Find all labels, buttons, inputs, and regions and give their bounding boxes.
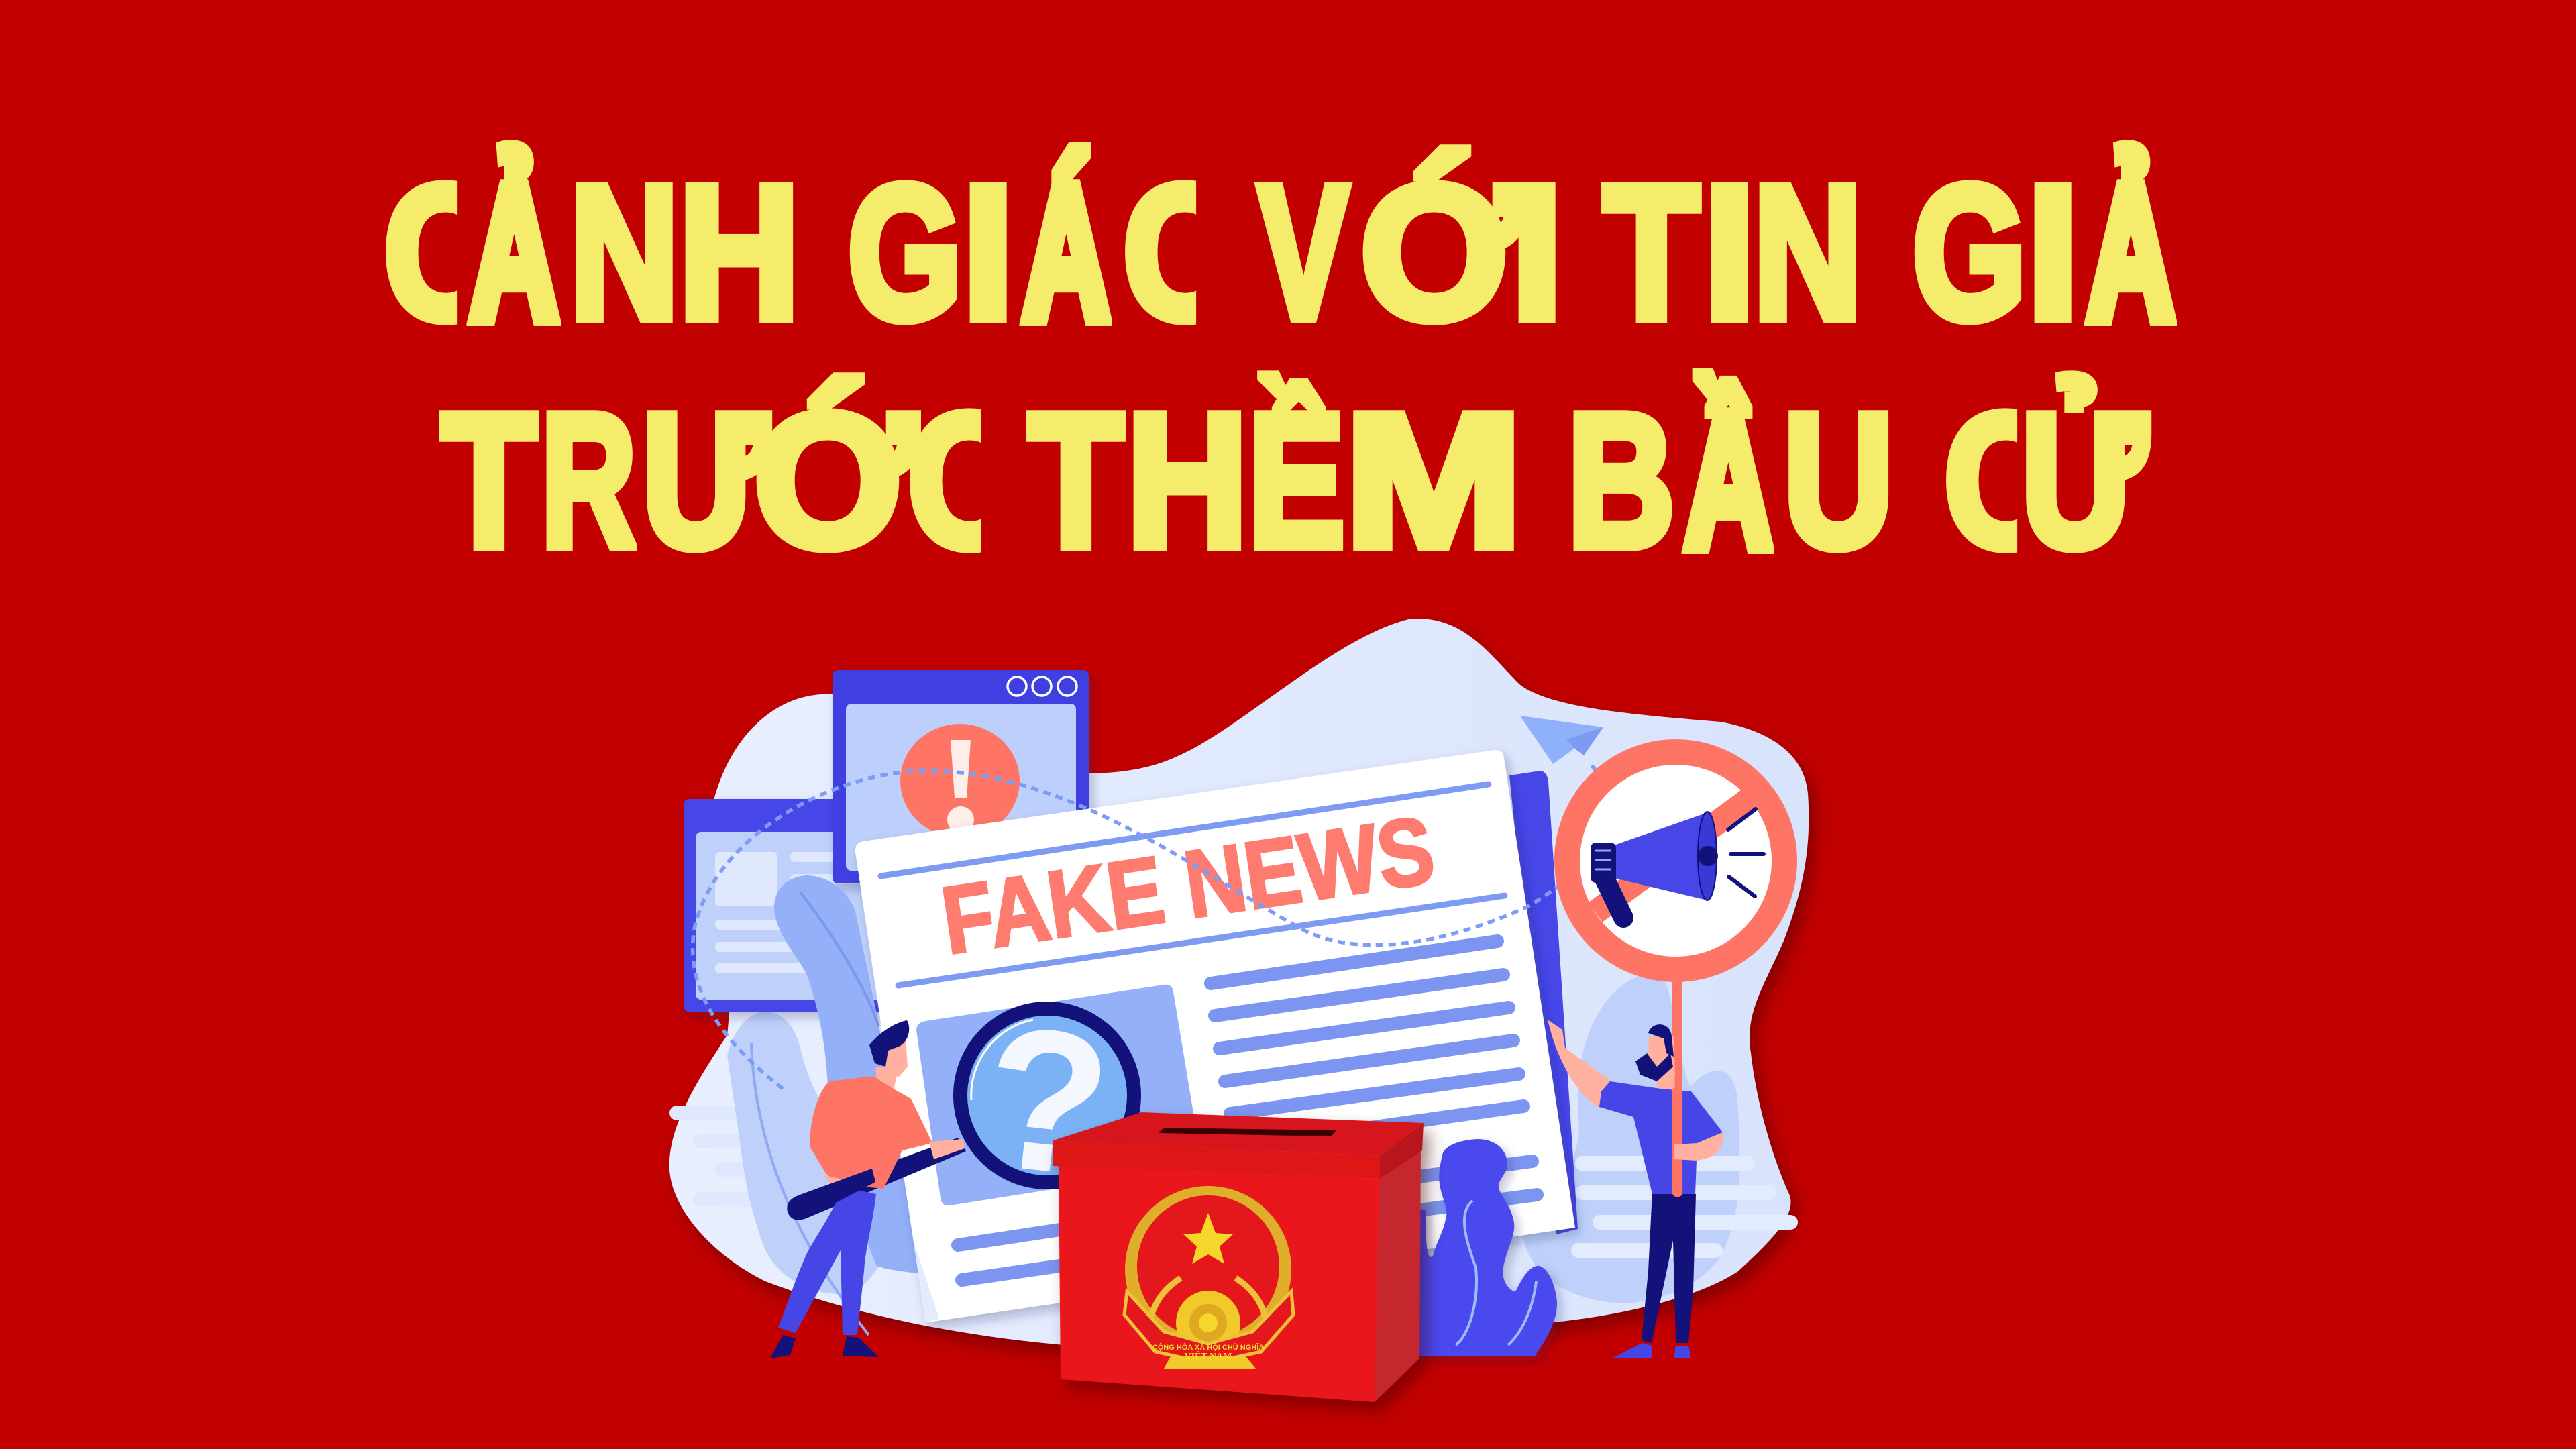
title line 1: G bbox=[1913, 146, 2027, 358]
beard bbox=[1635, 1053, 1673, 1081]
title line 2: B bbox=[1568, 374, 1674, 586]
head bbox=[883, 1036, 908, 1077]
hand on pole bbox=[1674, 1132, 1723, 1161]
lid side bbox=[1380, 1123, 1424, 1179]
title line 1: I bbox=[1511, 146, 1562, 358]
handle over hand bbox=[787, 1169, 875, 1220]
head bbox=[1648, 1036, 1675, 1083]
hair bbox=[1648, 1024, 1674, 1057]
title line 1: C bbox=[384, 146, 500, 358]
sound lines bbox=[1728, 809, 1764, 896]
top window bbox=[833, 670, 1089, 883]
blue leaf vein bbox=[800, 892, 879, 1026]
right pale leaves bbox=[1523, 973, 1739, 1303]
title line 1: V bbox=[1258, 146, 1348, 358]
article lines bbox=[958, 941, 1537, 1280]
emblem base bbox=[1164, 1356, 1256, 1368]
left pale leaf vein bbox=[751, 1043, 869, 1335]
man with magnifier bbox=[770, 1020, 965, 1358]
title line 1: N bbox=[570, 146, 678, 358]
title line 1: C bbox=[1123, 146, 1240, 358]
title line 2: T bbox=[441, 374, 537, 586]
left pale leaf bbox=[727, 1012, 892, 1294]
box front bbox=[1059, 1166, 1379, 1402]
title line 2: Ử bbox=[2021, 374, 2147, 586]
prohibition circle bbox=[1567, 752, 1784, 969]
article image bbox=[916, 985, 1202, 1205]
headline rules bbox=[881, 784, 1505, 985]
lid top bbox=[1053, 1112, 1424, 1156]
title line 1: G bbox=[848, 146, 962, 358]
title line 2: Ư bbox=[642, 374, 768, 586]
alert circle bbox=[900, 724, 1020, 838]
title line 1: Ả bbox=[470, 146, 558, 358]
title line 2: C bbox=[1944, 374, 2061, 586]
prohibition bar bbox=[1595, 793, 1758, 912]
megaphone handle bbox=[1605, 879, 1623, 918]
title line 2 bbox=[439, 368, 2152, 586]
exclamation mark bbox=[951, 740, 971, 798]
shirt bbox=[1599, 1081, 1723, 1194]
window buttons bbox=[1008, 677, 1077, 696]
newspaper back page bbox=[1509, 771, 1578, 1234]
sign bbox=[1567, 752, 1784, 1197]
title line 1: H bbox=[679, 146, 800, 358]
question mark: ? bbox=[974, 982, 1120, 1220]
title line 1: I bbox=[1704, 146, 1755, 358]
newspaper bbox=[855, 750, 1575, 1322]
background blob bbox=[669, 619, 1809, 1350]
wheat sprigs bbox=[1150, 1278, 1266, 1318]
pole over body bbox=[1672, 1087, 1682, 1197]
gear bbox=[1176, 1291, 1240, 1355]
blue leaf bbox=[774, 875, 926, 1275]
title line 2: T bbox=[1028, 374, 1124, 586]
title line 2: Ề bbox=[1248, 374, 1344, 586]
paper plane bbox=[1520, 716, 1603, 764]
title line 1: I bbox=[963, 146, 1014, 358]
pants bbox=[778, 1187, 876, 1335]
newspaper side shade bbox=[914, 1241, 939, 1322]
ballot slot bbox=[1159, 1128, 1336, 1136]
shoes bbox=[1612, 1343, 1691, 1358]
bearded man bbox=[1548, 1020, 1723, 1358]
ribbon bbox=[1124, 1291, 1293, 1363]
dotted flight path bbox=[693, 763, 1610, 1089]
back window bbox=[684, 799, 885, 1012]
title line 1: T bbox=[1604, 146, 1699, 358]
megaphone bbox=[1591, 809, 1764, 918]
title bbox=[386, 140, 2177, 586]
pointing arm bbox=[1548, 1020, 1611, 1108]
emblem text: CỘNG HÒA XÃ HỘI CHỦ NGHĨA bbox=[1152, 1343, 1264, 1352]
neck bbox=[875, 1067, 899, 1090]
star bbox=[1183, 1213, 1233, 1264]
title line 2: H bbox=[1127, 374, 1248, 586]
title line 2: Ầ bbox=[1685, 374, 1772, 586]
title line 1: I bbox=[2027, 146, 2078, 358]
shoes bbox=[770, 1335, 879, 1358]
right bars bbox=[1571, 1156, 1798, 1258]
blue plant bbox=[1395, 1139, 1557, 1356]
left bars bbox=[669, 1106, 898, 1207]
plant veins bbox=[1456, 1201, 1536, 1345]
magnifier bbox=[787, 982, 1141, 1220]
hair bbox=[869, 1020, 909, 1067]
neck bbox=[1654, 1053, 1675, 1090]
pole bbox=[1672, 979, 1682, 1197]
title line 2: Ớ bbox=[754, 374, 916, 586]
lid front bbox=[1053, 1140, 1380, 1179]
title line 1: N bbox=[1754, 146, 1862, 358]
title line 1: Á bbox=[1023, 146, 1110, 358]
ballot box bbox=[1053, 1112, 1424, 1402]
headline: FAKE NEWS: FAKE NEWS bbox=[935, 796, 1441, 975]
title line 1 bbox=[386, 140, 2177, 358]
title line 1: Ớ bbox=[1360, 146, 1522, 358]
title line 2: U bbox=[1784, 374, 1893, 586]
title line 2: C bbox=[908, 374, 1024, 586]
megaphone rim bbox=[1698, 812, 1717, 900]
magnifier handle bbox=[787, 1138, 966, 1220]
title line 1: Ả bbox=[2088, 146, 2174, 358]
emblem country: VIỆT NAM bbox=[1185, 1350, 1232, 1362]
pants bbox=[1642, 1191, 1696, 1343]
national emblem bbox=[1124, 1186, 1293, 1368]
box side bbox=[1375, 1147, 1421, 1402]
hands bbox=[824, 1139, 965, 1187]
title line 2: M bbox=[1345, 374, 1522, 586]
title line 2: R bbox=[541, 374, 636, 586]
megaphone grip bbox=[1591, 843, 1616, 883]
shirt bbox=[810, 1076, 932, 1189]
